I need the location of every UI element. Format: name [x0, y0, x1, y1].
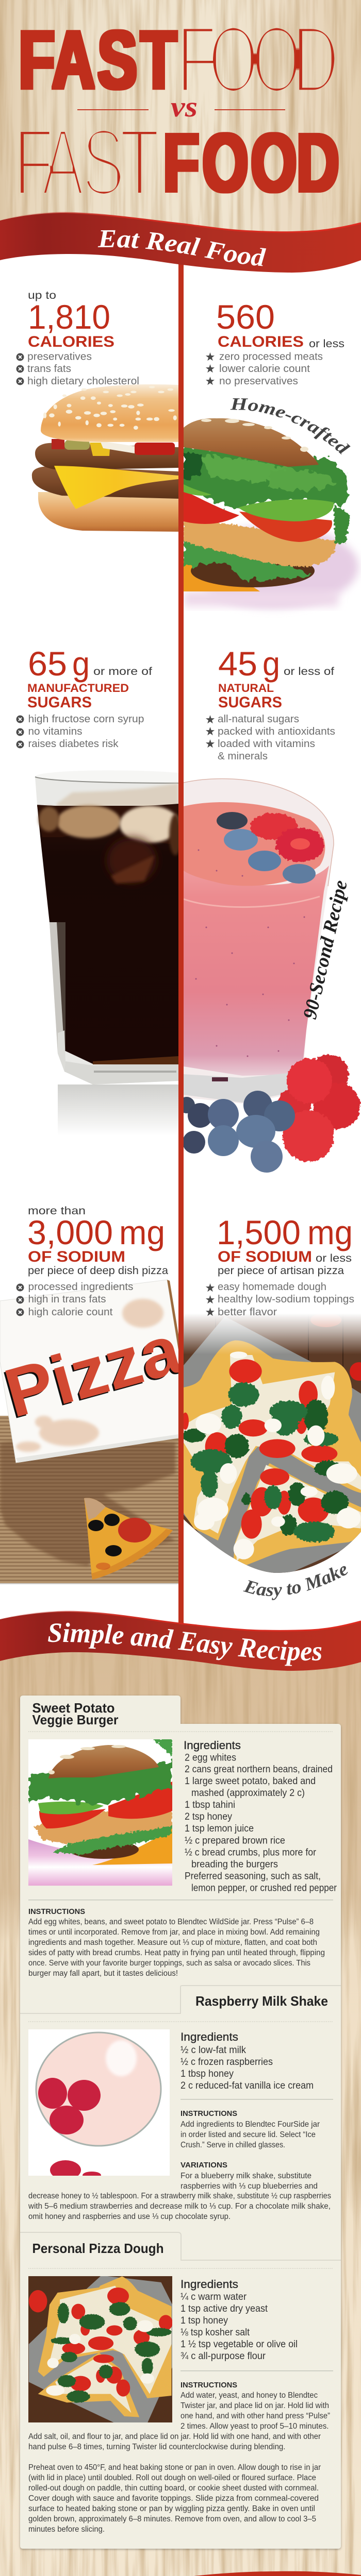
recipe card panel [20, 1696, 341, 2549]
instructions: Preheat oven to 450°F, and heat baking stone or pan in oven. Allow dough to rise in jar [28, 2463, 321, 2472]
title: fast food versus fast food [14, 5, 339, 216]
sugars real food text: packed with antioxidants [218, 726, 335, 737]
sugars fast food text: 65 [28, 645, 67, 683]
instructions and variations: in order listed and secure lid. Select “Ice [180, 2130, 316, 2139]
instructions and variations: For a blueberry milk shake, substitute [180, 2172, 311, 2180]
instructions: (with lid in place) until doubled. Roll out dough on well-oiled or floured surface. Place [28, 2473, 316, 2482]
sodium bullet list: real food [206, 1281, 354, 1318]
footer banner [0, 2571, 361, 2576]
sugars real food text: all-natural sugars [218, 714, 299, 725]
calories fast food text: CALORIES [28, 333, 114, 350]
sodium real food text [217, 1213, 353, 1277]
instructions: surface to heated baking stone or pan by wiggling pizza gently. Bake in oven until [28, 2504, 315, 2513]
sugars fast food text: no vitamins [28, 726, 83, 737]
ribbon: eat real food [0, 212, 361, 273]
instructions [28, 2381, 330, 2534]
recipe: raspberry milk shake [28, 1993, 333, 2221]
instructions: INSTRUCTIONS [28, 1907, 85, 1916]
instructions and variations: INSTRUCTIONS [180, 2109, 237, 2118]
ingredients list: lemon pepper, or crushed red pepper [191, 1883, 337, 1893]
instructions: rolled-out dough on paddle, thin cutting board, or cookie sheet dusted with cornmeal. [28, 2484, 319, 2493]
calories fast food text: trans fats [27, 363, 71, 375]
calories fast food text: up to [28, 290, 56, 301]
instructions: sides of patty with bread crumbs. Heat patty in frying pan until heated through, flipping [28, 1948, 325, 1957]
recipe: personal pizza dough [28, 2241, 333, 2534]
ingredients list: 1 tbsp tahini [185, 1800, 235, 1810]
header wood background [0, 0, 361, 242]
instructions: one hand, and with other hand press “Pulse” [180, 2412, 330, 2420]
instructions: Add salt, oil, and flour to jar, and place lid on jar. Hold lid with one hand, and with other [28, 2432, 321, 2441]
photo: berry smoothie with fruit [178, 778, 360, 1173]
title: fast food versus fast food: FAST [19, 14, 177, 106]
recipe: personal pizza dough: Personal Pizza Dough [32, 2241, 164, 2256]
ingredients list: 1 tsp lemon juice [185, 1823, 254, 1834]
instructions: times or until incorporated. Remove from jar, and place in mixing bowl. Add remaining [28, 1928, 320, 1937]
instructions: Cover dough with sauce and favorite toppings. Slide pizza from cornmeal-covered [28, 2494, 319, 2503]
instructions and variations: VARIATIONS [180, 2161, 227, 2170]
recipe: sweet potato veggie burger: Sweet Potato [32, 1700, 114, 1716]
recipes wood background [0, 1638, 361, 2576]
sodium fast food text: per piece of deep dish pizza [28, 1265, 168, 1277]
instructions and variations: Crush.” Serve in chilled glasses. [180, 2141, 285, 2149]
title: fast food versus fast food: FOOD [177, 5, 339, 113]
calories fast food text: high dietary cholesterol [27, 376, 139, 387]
instructions and variations: Add ingredients to Blendtec FourSide jar [180, 2120, 320, 2129]
sodium bullet list: real food: better flavor [218, 1307, 277, 1318]
instructions: ingredients and mash together. Measure out ⅓ cup of mixture, flatten, and coat both [28, 1938, 317, 1947]
ingredients list: Preferred seasoning, such as salt, [185, 1871, 321, 1882]
instructions: burger may fall apart, but it tastes delicious! [28, 1969, 178, 1978]
sugars real food text: or less of [284, 666, 334, 677]
white comparison panel [0, 242, 361, 1638]
label: home-crafted: Home-crafted [230, 398, 351, 454]
instructions: once. Serve with your favorite burger toppings, such as salsa or avocado slices. This [28, 1959, 310, 1968]
sodium fast food text: OF SODIUM [28, 1248, 125, 1265]
ingredients list: 1 large sweet potato, baked and [185, 1776, 316, 1787]
instructions and variations: omit honey and raspberries and use ⅓ cup chocolate syrup. [28, 2212, 231, 2221]
ingredients list: breading the burgers [191, 1859, 278, 1870]
sugars real food text [206, 645, 335, 762]
sugars real food text: SUGARS [218, 694, 282, 711]
sodium bullet list: fast food: processed ingredients [28, 1281, 133, 1293]
calories fast food text: 1,810 [28, 298, 110, 336]
instructions and variations [28, 2109, 331, 2221]
recipe: sweet potato veggie burger [28, 1700, 337, 1978]
sugars real food text: & minerals [218, 751, 268, 762]
sodium fast food text: 3,000 [27, 1213, 113, 1251]
instructions: Add water, yeast, and honey to Blendtec [180, 2391, 318, 2400]
calories real food text: CALORIES [218, 333, 304, 350]
ribbon: simple and easy recipes: Simple and Easy Recipes [48, 1623, 322, 1666]
photo: home-crafted veggie burger [184, 418, 358, 608]
sugars real food text: g [262, 645, 280, 683]
ingredients list: 1 ½ tsp vegetable or olive oil [180, 2339, 298, 2350]
sugars fast food text: SUGARS [27, 694, 92, 711]
title: fast food versus fast food: vs [171, 91, 198, 123]
sugars fast food text: or more of [93, 666, 152, 677]
sugars real food text: NATURAL [218, 682, 274, 694]
ingredients list: 1 tbsp honey [180, 2069, 234, 2079]
ingredients list: ¼ c warm water [180, 2292, 247, 2302]
instructions and variations: decrease honey to ½ tablespoon. For a strawberry milk shake, substitute ½ cup raspberries [28, 2192, 331, 2200]
ingredients list: 1 tsp active dry yeast [180, 2303, 268, 2314]
sugars fast food text: raises diabetes risk [28, 738, 119, 750]
calories real food text: or less [309, 338, 344, 350]
instructions: 2 times. Allow yeast to proof 5–10 minutes. [180, 2422, 329, 2431]
ingredients list: 2 cans great northern beans, drained [185, 1764, 333, 1775]
sodium fast food text: more than [28, 1205, 86, 1217]
title: fast food versus fast food: FOOD [163, 117, 339, 209]
instructions and variations: raspberries with ⅓ cup blueberries and [180, 2182, 318, 2191]
photo: fast food cheeseburger [32, 384, 178, 532]
ingredients list: ½ c bread crumbs, plus more for [185, 1848, 317, 1858]
instructions: hand pulse 6–8 times, turning Twister lid counterclockwise during blending. [28, 2443, 286, 2451]
ingredients list: 2 egg whites [185, 1752, 236, 1763]
ingredients list: ½ c frozen raspberries [180, 2057, 273, 2067]
photo: pizza on parchment [28, 2276, 175, 2423]
ingredients list: Ingredients [184, 1739, 241, 1752]
sodium real food text: 1,500 [217, 1213, 301, 1251]
sodium bullet list: fast food: high in trans fats [28, 1294, 106, 1305]
sugars fast food text: high fructose corn syrup [28, 714, 144, 725]
photo: milk shake from above [28, 2029, 170, 2180]
photo: pizza delivery box [0, 1280, 190, 1463]
title: fast food versus fast food: FAST [14, 108, 159, 216]
recipe: sweet potato veggie burger: Veggie Burger [32, 1712, 119, 1727]
calories real food text: 560 [216, 298, 275, 336]
calories fast food text: preservatives [27, 351, 92, 363]
photo: glass of cola with ice [35, 770, 182, 1136]
instructions: minutes before slicing. [28, 2525, 105, 2534]
ingredients list [180, 2278, 298, 2362]
sodium bullet list: fast food [17, 1281, 133, 1318]
sodium real food text: per piece of artisan pizza [218, 1265, 344, 1277]
sodium fast food text [27, 1205, 168, 1277]
ingredients list: 2 tsp honey [185, 1811, 232, 1822]
label: 90-second recipe: 90-Second Recipe [304, 881, 348, 1020]
calories fast food text [17, 290, 139, 387]
sugars real food text: loaded with vitamins [218, 738, 315, 750]
photo: artisan pizza with tomatoes and parsley [182, 1313, 361, 1576]
ingredients list: Ingredients [180, 2030, 238, 2043]
label: easy to make: Easy to Make [243, 1566, 348, 1600]
ingredients list [184, 1739, 337, 1893]
ingredients list: ¾ c all-purpose flour [180, 2351, 266, 2362]
center divider bar [178, 258, 184, 1628]
instructions and variations: with 5–6 medium strawberries and decrease milk to ⅓ cup. For a chocolate milk shake, [28, 2202, 331, 2211]
sugars fast food text: MANUFACTURED [27, 682, 129, 694]
sodium real food text: OF SODIUM [218, 1248, 312, 1265]
ingredients list: Ingredients [180, 2278, 238, 2291]
calories real food text: zero processed meats [219, 351, 323, 363]
sodium bullet list: real food: easy homemade dough [218, 1281, 326, 1293]
sodium real food text: or less [316, 1252, 352, 1264]
ingredients list: 1 tsp honey [180, 2315, 228, 2326]
ingredients list [180, 2030, 314, 2091]
sodium bullet list: real food: healthy low-sodium toppings [218, 1294, 354, 1305]
instructions: Twister jar, and place lid on jar. Hold lid with [180, 2401, 329, 2410]
instructions: INSTRUCTIONS [180, 2381, 237, 2389]
photo: greasy cardboard with leftover pizza slice [0, 1416, 178, 1584]
calories real food text: no preservatives [219, 376, 298, 387]
ingredients list: mashed (approximately 2 c) [191, 1788, 305, 1799]
sugars fast food text [17, 645, 152, 750]
photo: pizza delivery box: Pizza [0, 1311, 190, 1432]
ribbon: eat real food: Eat Real Food [98, 230, 266, 266]
sodium real food text: mg [307, 1213, 353, 1251]
sugars real food text: 45 [218, 645, 257, 683]
calories real food text [206, 298, 344, 387]
ingredients list: ⅛ tsp kosher salt [180, 2327, 250, 2338]
ingredients list: ½ c prepared brown rice [185, 1835, 285, 1846]
recipe: raspberry milk shake: Raspberry Milk Shake [195, 1993, 328, 2009]
sodium bullet list: fast food: high calorie count [28, 1307, 113, 1318]
calories real food text: lower calorie count [219, 363, 310, 375]
sodium fast food text: mg [119, 1213, 165, 1251]
ingredients list: 2 c reduced-fat vanilla ice cream [180, 2080, 314, 2091]
instructions: Add egg whites, beans, and sweet potato to Blendtec WildSide jar. Press “Pulse” 6–8 [28, 1918, 314, 1926]
instructions [28, 1907, 325, 1978]
ribbon: simple and easy recipes [0, 1611, 361, 1671]
sugars fast food text: g [72, 645, 90, 683]
instructions: golden brown, approximately 6–8 minutes. Remove from oven, and allow to cool 3–5 [28, 2515, 316, 2523]
ingredients list: ½ c low-fat milk [180, 2045, 246, 2056]
photo: veggie burger on plate [28, 1739, 172, 1886]
